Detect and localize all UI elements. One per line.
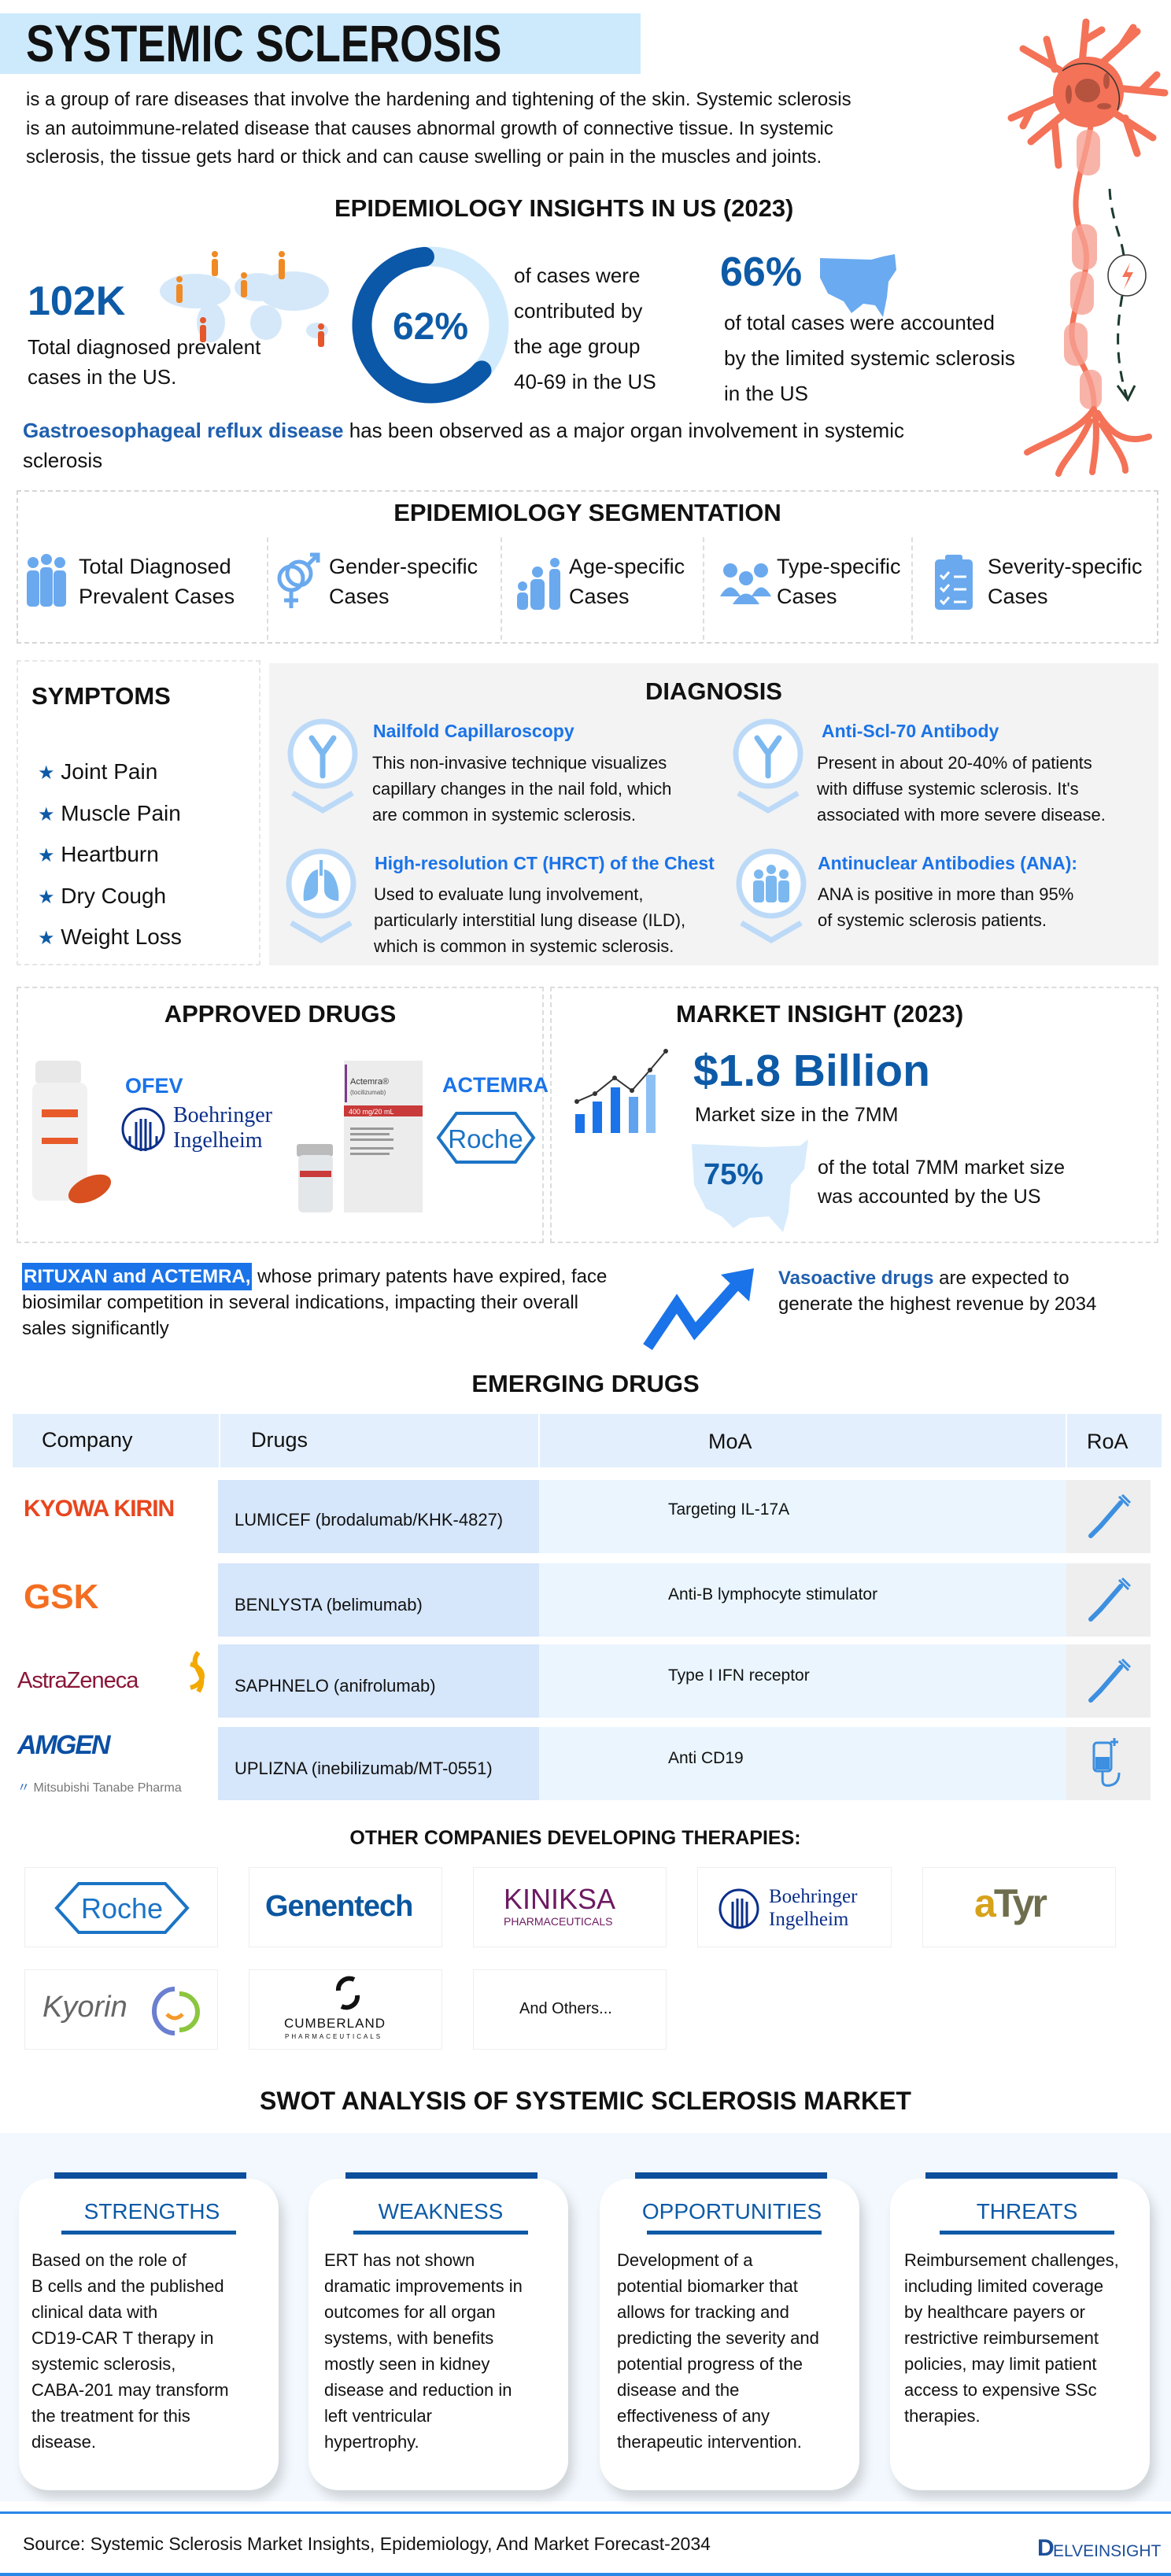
- item: severity-specific: Cases: [988, 585, 1048, 608]
- item: type-specific: Cases: [777, 585, 837, 608]
- card: threats: access to expensive SSc: [904, 2380, 1097, 2400]
- card: weakness: hypertrophy.: [324, 2432, 419, 2452]
- logo: Kiniksa: KINIKSA: [504, 1883, 615, 1915]
- donut chart: [353, 247, 508, 403]
- item: HRCT: Used to evaluate lung involvement,: [374, 884, 643, 904]
- logo: Boehringer Ingelheim: Ingelheim: [769, 1909, 848, 1930]
- item: anti-scl-70: associated with more severe disease.: [817, 805, 1106, 825]
- card: strengths: disease.: [31, 2432, 96, 2452]
- logo: aTyr: aTyr: [974, 1881, 1045, 1925]
- number: 102K: [28, 279, 125, 324]
- item: age-specific: [517, 555, 685, 610]
- row: AstraZeneca: SAPHNELO (anifrolumab): [235, 1676, 436, 1696]
- row: GSK: GSK: [24, 1578, 98, 1616]
- item: gender-specific: Cases: [329, 585, 390, 608]
- caption: [724, 311, 1015, 405]
- logo: Kiniksa: [473, 1867, 667, 1947]
- image: Actemra box and vial: [297, 1061, 423, 1212]
- logo: DelveInsight: D: [1037, 2535, 1055, 2561]
- card: threats: restrictive reimbursement: [904, 2328, 1099, 2348]
- logo: Boehringer Ingelheim: [697, 1867, 892, 1947]
- heading: APPROVED DRUGS: [164, 1000, 396, 1028]
- card: opportunities: [600, 2172, 868, 2502]
- title banner: [0, 13, 641, 74]
- item: gender-specific: [277, 552, 478, 608]
- stat: 66% limited SSc: [720, 249, 1015, 405]
- note: vasoactive drugs: Vasoactive drugs are expected to: [778, 1268, 1069, 1289]
- note: RITUXAN and ACTEMRA: [22, 1263, 607, 1339]
- caption: by the limited systemic sclerosis: [724, 346, 1015, 370]
- card: threats: including limited coverage: [904, 2276, 1103, 2296]
- card: opportunities: OPPORTUNITIES: [642, 2199, 822, 2224]
- card: strengths: clinical data with: [31, 2302, 157, 2322]
- symptom list: ★ Heartburn: [38, 842, 159, 866]
- card: opportunities: disease and the: [617, 2380, 739, 2400]
- panel: SWOT analysis: [0, 2133, 1171, 2501]
- item: nailfold: capillary changes in the nail fold, which: [372, 779, 671, 799]
- GERD note: [23, 419, 904, 472]
- card: weakness: left ventricular: [324, 2406, 432, 2426]
- intro paragraph: is an autoimmune-related disease that causes abnormal growth of connective tissue. In systemic: [26, 118, 833, 138]
- caption: contributed by: [514, 299, 642, 323]
- panel: market insight: [550, 987, 1158, 1243]
- logo: Boehringer Ingelheim: [121, 1103, 272, 1153]
- card: weakness: WEAKNESS: [379, 2199, 503, 2224]
- row: Kyowa Kirin: LUMICEF (brodalumab/KHK-4827): [235, 1510, 503, 1530]
- intro paragraph: sclerosis, the tissue gets hard or thick and can cause swelling or pain in the muscles and joints.: [26, 146, 822, 168]
- caption: 40-69 in the US: [514, 370, 656, 393]
- heading: MARKET INSIGHT (2023): [676, 1000, 963, 1028]
- image: Actemra box and vial: 400 mg/20 mL: [349, 1108, 394, 1116]
- US share with map: of the total 7MM market size: [818, 1157, 1065, 1179]
- caption: [28, 335, 261, 389]
- symptom list: ★ Dry Cough: [38, 883, 166, 908]
- card: weakness: dramatic improvements in: [324, 2276, 523, 2296]
- logo: Roche: [436, 1112, 535, 1164]
- card: opportunities: effectiveness of any: [617, 2406, 770, 2426]
- logo: aTyr: [922, 1867, 1116, 1947]
- card: strengths: STRENGTHS: [84, 2199, 220, 2224]
- GERD note: sclerosis: [23, 448, 102, 472]
- item: age-specific: Cases: [569, 585, 630, 608]
- item: HRCT: [286, 848, 715, 956]
- row: Amgen / Mitsubishi Tanabe: 〃 Mitsubishi Tanabe Pharma: [17, 1781, 182, 1795]
- logo: DelveInsight: [1037, 2535, 1151, 2562]
- table header: [13, 1414, 1162, 1467]
- image: Actemra box and vial: Actemra®: [350, 1077, 389, 1087]
- symptom list: ★ Muscle Pain: [38, 801, 181, 825]
- item: anti-scl-70: with diffuse systemic sclerosis. It's: [817, 779, 1079, 799]
- card: weakness: outcomes for all organ: [324, 2302, 496, 2322]
- logo: Cumberland: [249, 1969, 442, 2050]
- icon: bar chart with trend line: [574, 1049, 668, 1133]
- note: RITUXAN and ACTEMRA: RITUXAN and ACTEMRA, whose primary patents have expired, face: [24, 1266, 607, 1287]
- card: opportunities: allows for tracking and: [617, 2302, 789, 2322]
- stat: 62% donut: [353, 247, 656, 403]
- logo: and others: [473, 1969, 667, 2050]
- table: emerging drugs: [13, 1414, 1162, 1800]
- table header: RoA: [1087, 1430, 1129, 1453]
- item: nailfold: Nailfold Capillaroscopy: [373, 721, 574, 741]
- image: Actemra box and vial: (tocilizumab): [350, 1089, 386, 1096]
- footer: source: Source: Systemic Sclerosis Market Insights, Epidemiology, And Market Forecast-2034: [23, 2534, 711, 2554]
- note: RITUXAN and ACTEMRA: sales significantly: [22, 1318, 169, 1339]
- item: gender-specific: Gender-specific: [329, 555, 478, 578]
- market size value: $1.8 Billion: [693, 1046, 930, 1096]
- card: opportunities: therapeutic intervention.: [617, 2432, 802, 2452]
- logo: Kyorin: Kyorin: [42, 1991, 127, 2024]
- item: nailfold: are common in systemic sclerosis.: [372, 805, 636, 825]
- row: Kyowa Kirin: [24, 1480, 1151, 1553]
- logo: Kyorin: [24, 1969, 218, 2050]
- row: Kyowa Kirin: Targeting IL-17A: [668, 1500, 789, 1519]
- card: strengths: B cells and the published: [31, 2276, 224, 2296]
- logo: and others: And Others...: [519, 2000, 612, 2017]
- row: Amgen / Mitsubishi Tanabe: UPLIZNA (inebilizumab/MT-0551): [235, 1759, 493, 1778]
- card: weakness: [308, 2172, 577, 2502]
- caption: of cases were: [514, 264, 640, 287]
- heading: SYMPTOMS: [31, 682, 171, 710]
- card: weakness: mostly seen in kidney: [324, 2354, 489, 2374]
- card: opportunities: predicting the severity and: [617, 2328, 819, 2348]
- logo: Roche: Roche: [448, 1124, 523, 1153]
- item: ANA: of systemic sclerosis patients.: [818, 910, 1047, 930]
- table header: MoA: [708, 1430, 752, 1453]
- card: strengths: CD19-CAR T therapy in: [31, 2328, 214, 2348]
- caption: [514, 264, 656, 393]
- image: OFEV bottle: [32, 1061, 112, 1204]
- label: OFEV: OFEV: [125, 1074, 183, 1098]
- card: threats: therapies.: [904, 2406, 981, 2426]
- GERD note: Gastroesophageal reflux disease has been observed as a major organ involvement in systemic: [23, 419, 904, 442]
- item: nailfold: [288, 719, 671, 825]
- caption: in the US: [724, 382, 808, 405]
- item: type-specific: [720, 555, 901, 608]
- panel: diagnosis: [269, 663, 1158, 965]
- icon: US map: [820, 254, 896, 317]
- item: HRCT: which is common in systemic sclerosis.: [374, 936, 674, 956]
- item: ANA: [737, 848, 1077, 943]
- item: severity-specific: Severity-specific: [988, 555, 1143, 578]
- row: GSK: BENLYSTA (belimumab): [235, 1595, 423, 1615]
- symptom list: [38, 759, 182, 949]
- intro paragraph: [26, 89, 851, 168]
- card: opportunities: potential progress of the: [617, 2354, 803, 2374]
- row: GSK: [24, 1563, 1151, 1637]
- note: vasoactive drugs: [778, 1268, 1096, 1315]
- logo: Boehringer Ingelheim: Ingelheim: [173, 1128, 263, 1153]
- caption: Total diagnosed prevalent: [28, 335, 260, 359]
- heading: other companies: OTHER COMPANIES DEVELOPING THERAPIES:: [349, 1827, 801, 1849]
- logo: Genentech: Genentech: [265, 1890, 412, 1923]
- card: strengths: [19, 2172, 287, 2502]
- neuron illustration: [1007, 19, 1168, 477]
- caption: cases in the US.: [28, 365, 176, 389]
- card: opportunities: potential biomarker that: [617, 2276, 798, 2296]
- item: nailfold: This non-invasive technique visualizes: [372, 753, 667, 773]
- row: Amgen / Mitsubishi Tanabe: [17, 1727, 1151, 1800]
- caption: the age group: [514, 334, 640, 358]
- row: Amgen / Mitsubishi Tanabe: Anti CD19: [668, 1749, 744, 1767]
- card: weakness: systems, with benefits: [324, 2328, 493, 2348]
- stat: 102K prevalent cases: [28, 251, 329, 389]
- item: HRCT: High-resolution CT (HRCT) of the Chest: [375, 853, 715, 873]
- US share with map: 75%: [704, 1158, 763, 1191]
- item: age-specific: Age-specific: [569, 555, 685, 578]
- heading: DIAGNOSIS: [645, 677, 782, 705]
- heading: epidemiology insights: EPIDEMIOLOGY INSIGHTS IN US (2023): [334, 194, 793, 222]
- card: strengths: systemic sclerosis,: [31, 2354, 175, 2374]
- item: anti-scl-70: Anti-Scl-70 Antibody: [822, 721, 999, 741]
- caption: of total cases were accounted: [724, 311, 995, 334]
- card: threats: by healthcare payers or: [904, 2302, 1085, 2322]
- title text: SYSTEMIC SCLEROSIS: [26, 14, 501, 72]
- card: threats: Reimbursement challenges,: [904, 2250, 1119, 2270]
- row: Kyowa Kirin: KYOWA KIRIN: [24, 1496, 174, 1522]
- item: total diagnosed: Prevalent Cases: [79, 585, 235, 608]
- item: type-specific: Type-specific: [777, 555, 901, 578]
- row: AstraZeneca: [17, 1644, 1151, 1718]
- item: anti-scl-70: Present in about 20-40% of patients: [817, 753, 1092, 773]
- symptom list: ★ Joint Pain: [38, 759, 157, 784]
- card: opportunities: Development of a: [617, 2250, 752, 2270]
- heading: SWOT: SWOT ANALYSIS OF SYSTEMIC SCLEROSIS MARKET: [260, 2087, 911, 2115]
- row: GSK: Anti-B lymphocyte stimulator: [668, 1585, 877, 1604]
- symptom list: ★ Weight Loss: [38, 924, 182, 949]
- item: anti-scl-70: [733, 719, 1106, 825]
- card: weakness: disease and reduction in: [324, 2380, 512, 2400]
- logo: Boehringer Ingelheim: Boehringer: [173, 1103, 272, 1127]
- card: weakness: ERT has not shown: [324, 2250, 475, 2270]
- table header: Company: [42, 1428, 133, 1452]
- panel: approved drugs: [17, 987, 544, 1243]
- table header: Drugs: [251, 1428, 308, 1452]
- logo: Roche: [24, 1867, 218, 1947]
- logo: Kiniksa: PHARMACEUTICALS: [504, 1915, 612, 1928]
- row: AstraZeneca: AstraZeneca: [17, 1668, 138, 1693]
- icon: trend arrow: [643, 1268, 754, 1350]
- intro paragraph: is a group of rare diseases that involve the hardening and tightening of the skin. Systemic sclerosis: [26, 89, 851, 110]
- item: total diagnosed: Total Diagnosed: [79, 555, 231, 578]
- item: HRCT: particularly interstitial lung disease (ILD),: [374, 910, 685, 930]
- card: threats: [890, 2172, 1150, 2490]
- logo: Boehringer Ingelheim: Boehringer: [769, 1886, 857, 1907]
- card: strengths: the treatment for this: [31, 2406, 190, 2426]
- item: severity-specific: [935, 555, 1143, 610]
- logo: Roche: Roche: [81, 1892, 163, 1925]
- logo: Cumberland: PHARMACEUTICALS: [285, 2033, 382, 2040]
- label: ACTEMRA: ACTEMRA: [442, 1073, 549, 1097]
- card: threats: policies, may limit patient: [904, 2354, 1097, 2374]
- heading: emerging drugs: EMERGING DRUGS: [471, 1370, 700, 1397]
- US share with map: was accounted by the US: [818, 1186, 1040, 1208]
- row: Amgen / Mitsubishi Tanabe: AMGEN: [17, 1730, 109, 1760]
- row: AstraZeneca: Type I IFN receptor: [668, 1666, 810, 1685]
- card: strengths: CABA-201 may transform: [31, 2380, 229, 2400]
- note: vasoactive drugs: generate the highest revenue by 2034: [778, 1294, 1096, 1315]
- item: ANA: Antinuclear Antibodies (ANA):: [818, 853, 1077, 873]
- heading: EPIDEMIOLOGY SEGMENTATION: [393, 499, 781, 526]
- note: RITUXAN and ACTEMRA: biosimilar competition in several indications, impacting their overall: [22, 1292, 578, 1313]
- logo: DelveInsight: ELVEINSIGHT: [1053, 2542, 1161, 2560]
- item: ANA: ANA is positive in more than 95%: [818, 884, 1073, 904]
- panel: epidemiology segmentation: [17, 490, 1158, 644]
- logo grid: other companies: [24, 1867, 1116, 2050]
- caption: Market size in the 7MM: [695, 1104, 898, 1126]
- donut chart: 62%: [393, 306, 468, 348]
- icon: world map with people: [160, 251, 329, 347]
- item: total diagnosed: [27, 554, 235, 608]
- card: strengths: Based on the role of: [31, 2250, 187, 2270]
- number: 66%: [720, 249, 802, 295]
- panel: symptoms: [17, 660, 260, 965]
- card: threats: THREATS: [977, 2199, 1077, 2224]
- US share with map: [692, 1139, 1065, 1232]
- logo: Genentech: [249, 1867, 442, 1947]
- logo: Cumberland: CUMBERLAND: [284, 2016, 386, 2031]
